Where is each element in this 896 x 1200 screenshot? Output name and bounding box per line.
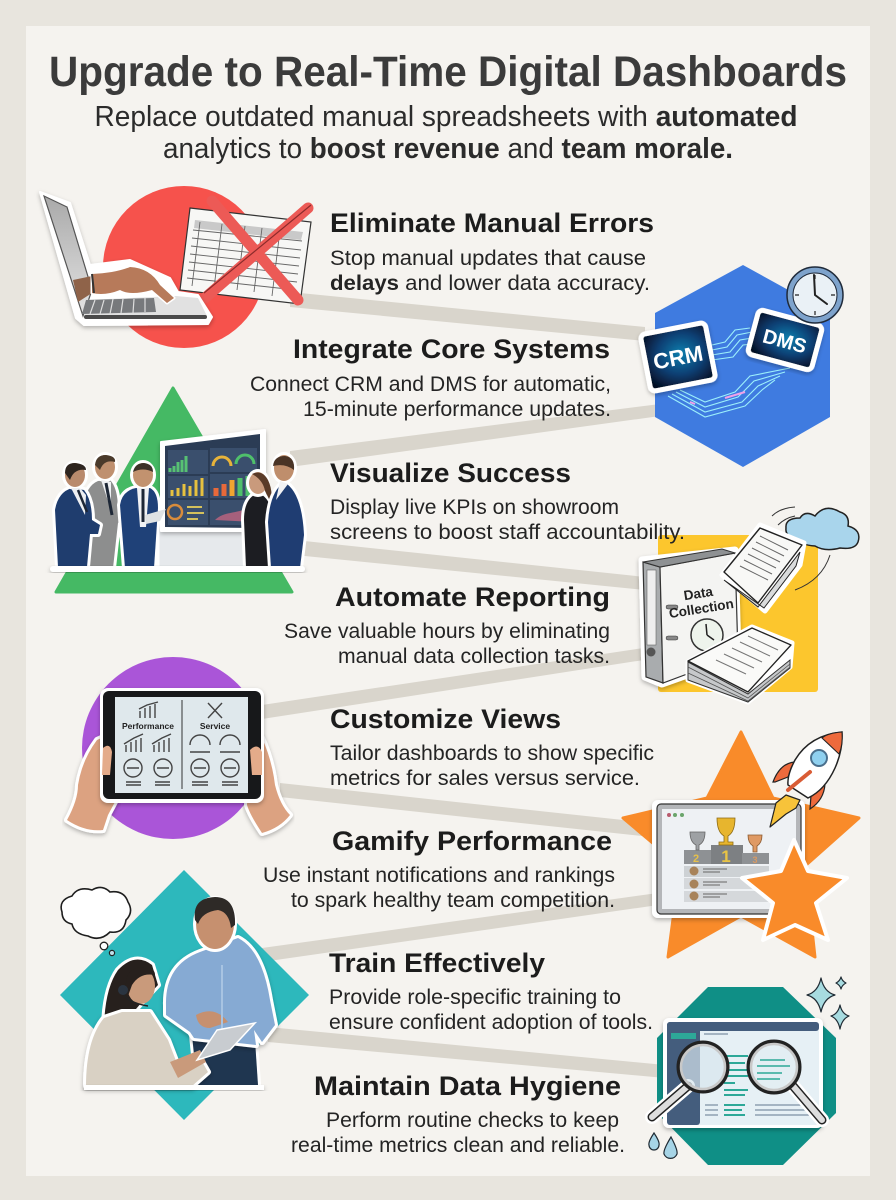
icon: leaderboard window [652,800,805,918]
text: gamify performance: Use instant notifications and rankings [263,864,615,887]
podium: 2 [693,853,699,865]
icon: hand right [247,735,290,833]
text: visualize success: screens to boost staff accountability. [330,521,685,544]
teal octagon [657,987,836,1165]
orange star [623,732,859,957]
green triangle [56,388,292,592]
text: eliminate manual errors: delays and lower data accuracy. [330,272,650,295]
text: integrate core systems: Integrate Core Systems [293,334,610,364]
text: visualize success: Display live KPIs on showroom [330,496,619,519]
icon: sparkles [807,977,849,1029]
icon: binder: Collection [668,596,735,621]
blue hexagon [655,265,830,467]
text: train effectively [329,948,653,1034]
text: train effectively: Provide role-specific training to [329,986,621,1009]
icon: small star [742,840,847,940]
text: integrate core systems: Connect CRM and DMS for automatic, [250,373,611,396]
text: eliminate manual errors: Eliminate Manual Errors [330,208,654,238]
connector strips [262,292,665,1078]
text: customize views: Tailor dashboards to show specific [330,742,654,765]
icon: binder [642,549,738,684]
icon: water drops [649,1133,677,1158]
sticker base bar [50,566,305,572]
icon: DMS screen: DMS [760,326,809,358]
icon: tablet [100,688,264,803]
podium: 1 [721,847,731,866]
icon: laptop with hand [40,192,212,325]
text: gamify performance: to spark healthy team competition. [291,889,615,912]
teal diamond [60,870,309,1120]
man [166,897,275,1085]
person 5 [268,455,304,568]
icon: binder: Data [683,584,714,603]
text: integrate core systems [250,334,611,421]
panel: visualize success illustration [50,388,305,592]
icon: magnifier left [652,1043,727,1117]
text: integrate core systems: 15-minute performance updates. [303,398,611,421]
circuit lines [668,328,790,417]
text: eliminate manual errors [330,208,654,295]
icon: flying papers [722,525,804,611]
wall under display [158,500,270,568]
icon: cloud [786,508,859,550]
title: Upgrade to Real-Time Digital Dashboards [49,48,847,96]
panel: maintain data hygiene illustration [649,977,849,1165]
icon: crossed-out spreadsheet [180,201,311,304]
subtitle: analytics to boost revenue and team morale. [163,133,733,165]
icon: dashboard window [663,1018,823,1128]
red circle [103,186,265,348]
icon: rocket [770,732,842,827]
woman [86,960,208,1086]
icon: tablet: Performance [122,721,174,731]
text: maintain data hygiene: real-time metrics clean and reliable. [291,1134,625,1157]
icon: tablet: Service [200,721,230,731]
panel: train effectively illustration [60,870,309,1120]
trophies [690,832,705,850]
panel: customize views illustration [67,657,290,839]
icon: magnifier right [749,1042,822,1120]
person 1 [55,463,100,567]
motion lines [772,507,830,590]
text: customize views: Customize Views [330,704,561,734]
text: train effectively: ensure confident adoption of tools. [329,1011,653,1034]
text: maintain data hygiene: Maintain Data Hygiene [314,1071,621,1101]
icon: thumb left [102,746,112,775]
subtitle: Replace outdated manual spreadsheets with automated [94,101,798,133]
purple circle [82,657,264,839]
icon: hand left [67,735,116,830]
podium: 3 [752,855,758,865]
icon: paper stack [688,627,792,702]
subtitle [94,101,798,165]
yellow square [658,535,818,692]
text: visualize success [330,458,685,544]
text: train effectively: Train Effectively [329,948,545,978]
text: customize views [330,704,654,790]
panel: gamify performance illustration [623,732,859,957]
text: automate reporting: Save valuable hours by eliminating [284,620,610,643]
text: maintain data hygiene: Perform routine checks to keep [326,1109,619,1132]
panel: eliminate manual errors illustration [40,186,311,348]
text: maintain data hygiene [291,1071,625,1157]
icon: thumb right [250,746,262,775]
icon: CRM screen [640,322,716,392]
text: gamify performance: Gamify Performance [332,826,612,856]
sticker base bar [84,1085,264,1090]
icon: clock [787,267,843,323]
text: automate reporting: Automate Reporting [335,582,610,612]
person 2 [84,455,125,568]
person 3 [120,463,166,568]
icon: dashboard wall display [161,430,265,531]
text: automate reporting [284,582,610,668]
text: automate reporting: manual data collection tasks. [338,645,610,668]
text: visualize success: Visualize Success [330,458,571,488]
icon: DMS screen [747,309,823,371]
icon: thought cloud [61,887,131,956]
podium [684,845,769,866]
panel: automate reporting illustration [642,507,859,702]
text: gamify performance [263,826,615,912]
rows [684,866,769,902]
panel: integrate core systems illustration [640,265,843,467]
text: customize views: metrics for sales versus service. [330,767,640,790]
icon: CRM screen: CRM [651,340,705,375]
text: eliminate manual errors: Stop manual updates that cause [330,247,646,270]
person 4 [244,472,272,568]
icon: tablet [197,1023,255,1060]
